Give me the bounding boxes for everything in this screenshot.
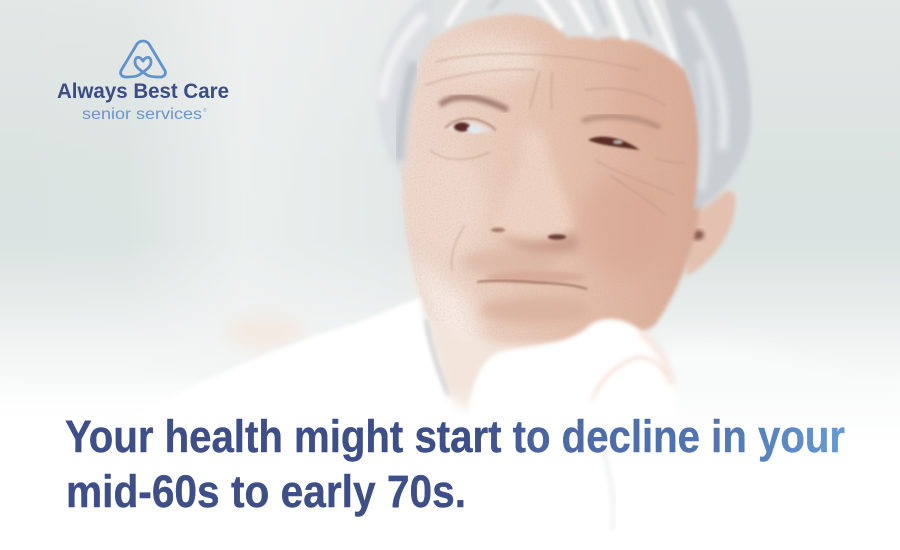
- headline line 2: mid-60s to early 70s.: [66, 466, 466, 517]
- wrinkles: [425, 54, 685, 270]
- right hair highlights: [688, 10, 724, 190]
- forehead highlight: [440, 40, 540, 80]
- headline: [65, 411, 845, 517]
- logo mark: [121, 41, 165, 77]
- nostrils: [491, 228, 566, 240]
- hair back: [379, 0, 751, 212]
- fringe strands: [448, 0, 684, 56]
- upper lip area: [462, 249, 558, 275]
- neck: [428, 315, 560, 420]
- chin shade: [480, 297, 590, 323]
- right eye: [588, 137, 640, 150]
- cheek crease shade: [579, 175, 671, 275]
- left hair highlight: [382, 15, 425, 100]
- lip shade: [485, 271, 585, 283]
- left eyebrow: [440, 97, 508, 110]
- ear shadow: [690, 230, 704, 240]
- robe fold: [600, 440, 613, 530]
- left side hair: [380, 0, 450, 175]
- right eyebrow: [582, 117, 660, 128]
- left hair grey edge: [399, 62, 414, 160]
- nose shadow: [500, 232, 580, 253]
- registered mark: ®: [203, 107, 207, 114]
- top fringe: [432, 0, 684, 70]
- lower face pale wash: [410, 255, 490, 365]
- right hair: [665, 0, 751, 210]
- nose: [490, 130, 572, 240]
- hair front: [380, 0, 751, 210]
- portrait of senior man: [119, 0, 752, 527]
- logo: [57, 41, 229, 123]
- fade overlay: [0, 385, 900, 445]
- robe collar and shoulders: [100, 298, 470, 550]
- left cheek highlight: [416, 155, 484, 255]
- face: [401, 4, 702, 368]
- logo tagline: senior services: [82, 106, 202, 123]
- skin texture: [402, 26, 666, 338]
- ear: [686, 190, 735, 276]
- mouth: [477, 281, 587, 289]
- forehead shade: [618, 55, 682, 155]
- left eye: [445, 118, 496, 133]
- hand knuckle tint: [640, 332, 671, 385]
- finger outline: [592, 358, 668, 400]
- hand: [464, 319, 700, 550]
- logo name: Always Best Care: [57, 80, 229, 103]
- robe right side: [620, 342, 900, 550]
- collar shadow: [426, 320, 448, 395]
